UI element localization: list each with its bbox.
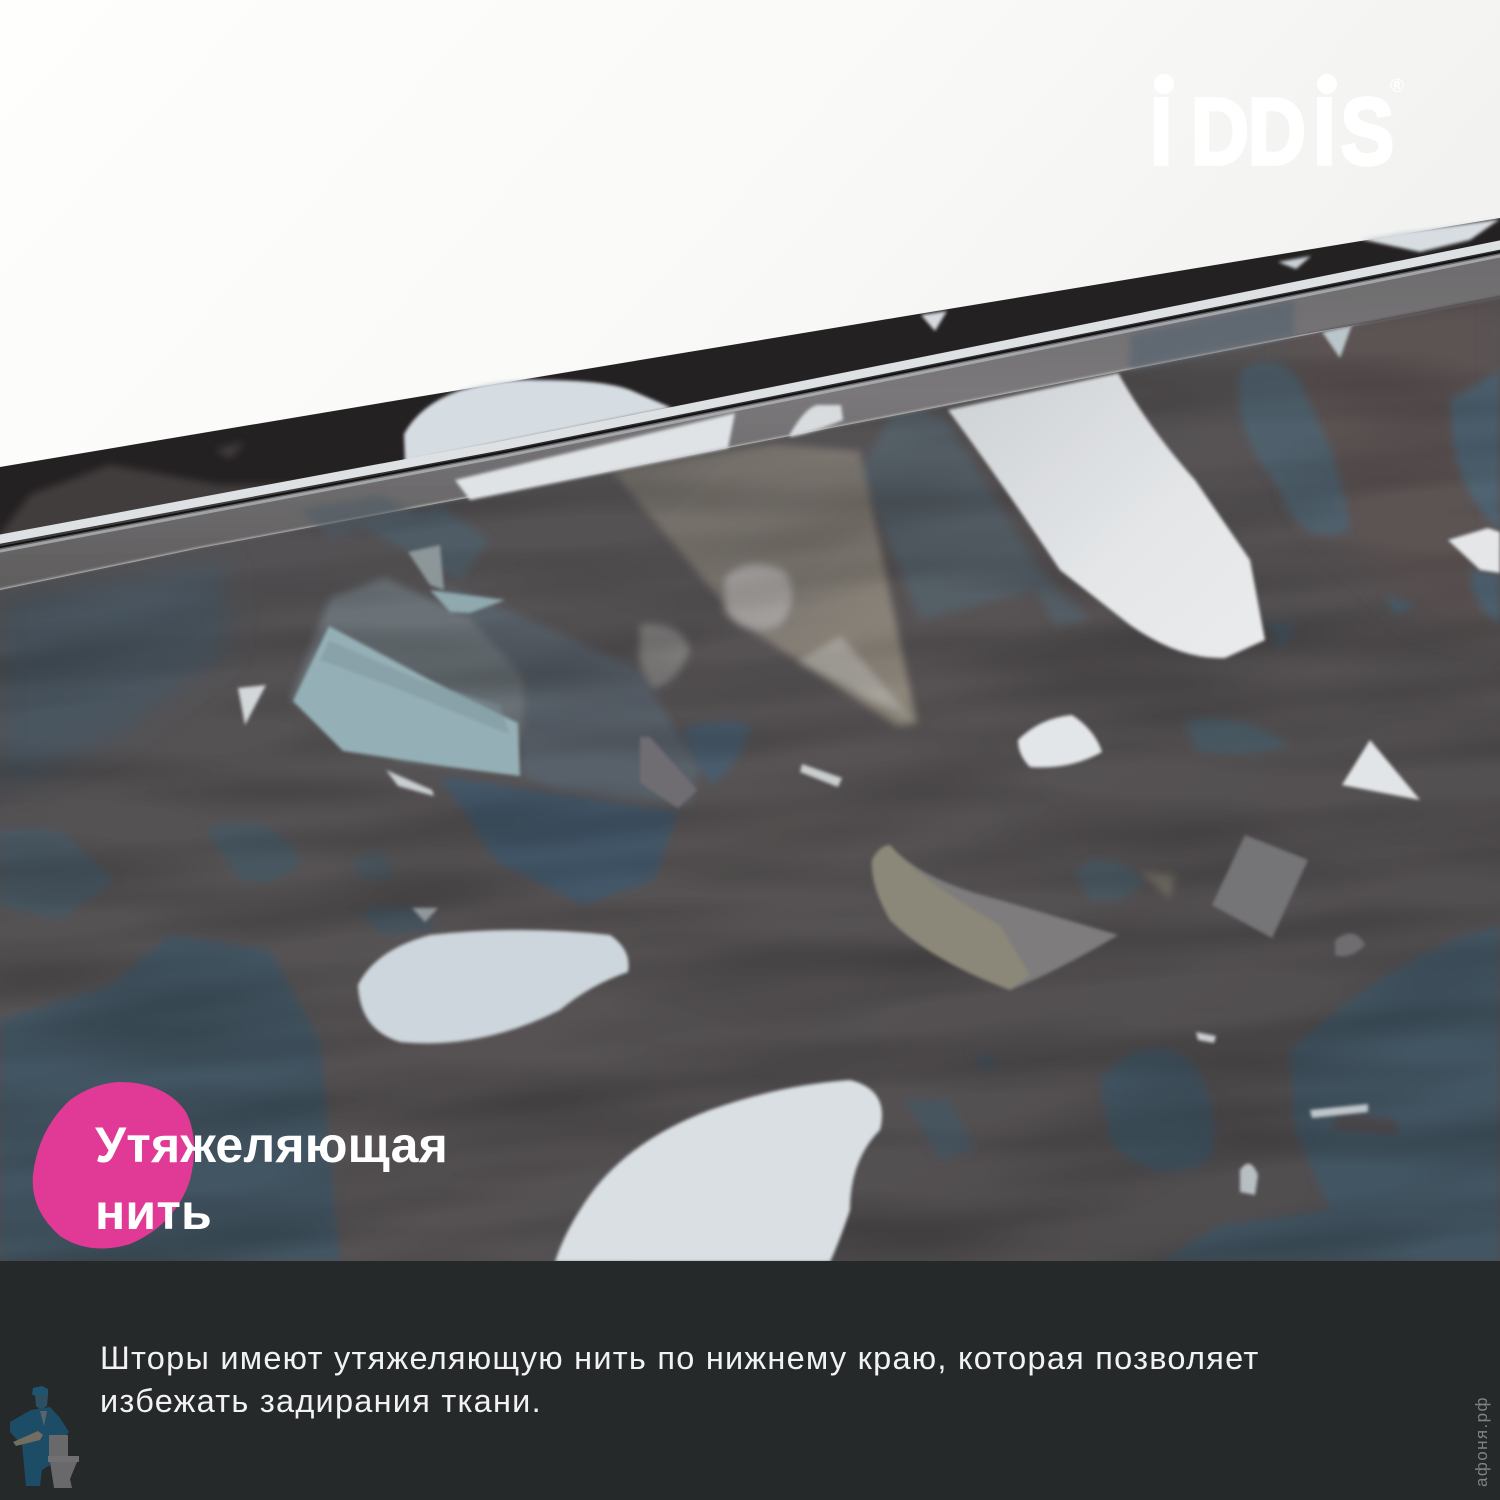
vertical watermark: афоня.рф	[1472, 1397, 1491, 1487]
heading	[95, 1117, 448, 1240]
hem roll band	[0, 248, 1500, 594]
description text: Шторы имеют утяжеляющую нить по нижнему краю, которая позволяет	[100, 1340, 1259, 1376]
heading: нить	[95, 1184, 212, 1240]
white wall background	[0, 0, 1500, 480]
description text: избежать задирания ткани.	[100, 1383, 542, 1419]
bottom dark panel	[0, 1261, 1500, 1500]
logo registered mark: ®	[1390, 76, 1404, 97]
logo: IDDIS: IDDIS	[1150, 78, 1394, 184]
back layer of fabric above seam	[0, 218, 1500, 560]
stitched white edge and black seam	[0, 243, 1500, 541]
curtain fabric	[0, 74, 1500, 1261]
light chips	[948, 373, 1265, 658]
description text	[100, 1340, 1259, 1419]
heading: Утяжеляющая	[95, 1117, 448, 1173]
blue patches on hem	[300, 300, 1294, 540]
translucent terrazzo shapes	[0, 322, 1500, 1261]
main fabric base	[0, 297, 1500, 1262]
wrinkles in fabric	[0, 364, 1500, 1261]
icon: plumber with toilet watermark	[10, 1386, 79, 1488]
